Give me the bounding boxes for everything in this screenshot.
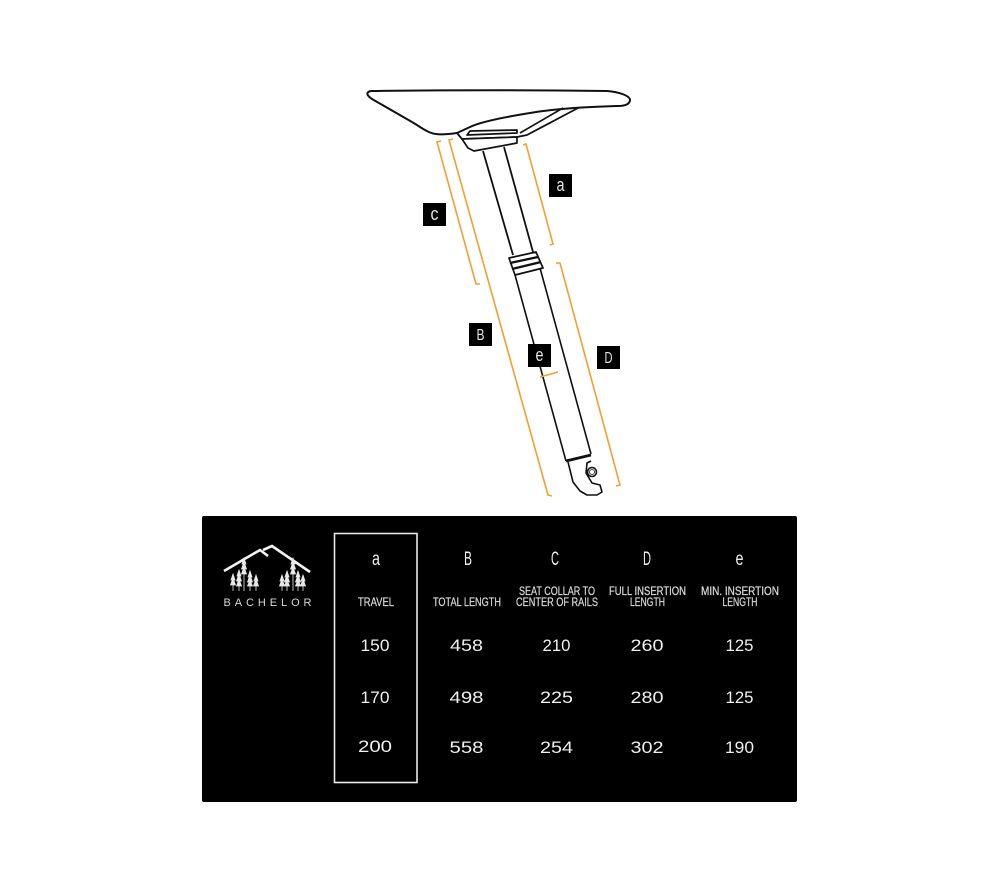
label D: D — [604, 350, 612, 367]
column D: full insertion length: LENGTH — [630, 595, 665, 609]
label c — [423, 203, 446, 226]
upper post tube — [483, 147, 533, 255]
column B: total length: 498 — [450, 688, 484, 707]
label e: e — [536, 345, 544, 365]
post collar — [509, 252, 543, 275]
column e: min insertion length: e — [736, 549, 744, 570]
orange bracket a — [523, 144, 553, 245]
column e: min insertion length: LENGTH — [722, 595, 758, 609]
column D: full insertion length: 302 — [630, 738, 664, 757]
label a: a — [556, 175, 565, 195]
column D: full insertion length: D — [643, 549, 651, 570]
column C: seat collar to center of rails: C — [551, 549, 559, 570]
column D: full insertion length: FULL INSERTION — [609, 584, 686, 598]
travel column highlight — [334, 534, 417, 782]
label B: B — [476, 327, 484, 344]
post lever head — [568, 461, 602, 495]
saddle — [367, 90, 630, 151]
column B: total length: 558 — [450, 738, 484, 757]
column a: travel: a — [372, 549, 380, 570]
column e: min insertion length: MIN. INSERTION — [701, 584, 779, 598]
orange bracket c — [437, 141, 480, 284]
column C: seat collar to center of rails: SEAT COLLAR TO — [519, 584, 595, 598]
panel: spec table — [202, 516, 797, 802]
column D: full insertion length — [609, 549, 686, 757]
label c: c — [430, 204, 438, 224]
column C: seat collar to center of rails: 254 — [540, 738, 573, 757]
column B: total length: B — [464, 549, 472, 570]
column e: min insertion length: 125 — [726, 688, 754, 707]
column B: total length: 458 — [450, 636, 483, 655]
label a — [549, 174, 572, 197]
column B: total length — [433, 549, 501, 757]
seatpost diagram — [367, 90, 630, 496]
label D — [597, 346, 620, 369]
column e: min insertion length — [701, 549, 779, 757]
column C: seat collar to center of rails — [516, 549, 598, 757]
label B — [469, 323, 492, 346]
column a: travel: TRAVEL — [358, 595, 394, 609]
column D: full insertion length: 260 — [630, 636, 664, 655]
column e: min insertion length: 190 — [725, 738, 754, 757]
column C: seat collar to center of rails: CENTER OF RAILS — [516, 595, 598, 609]
orange bracket B — [449, 139, 552, 496]
column D: full insertion length: 280 — [630, 688, 664, 707]
column a: travel — [358, 549, 394, 756]
orange bracket D — [556, 263, 620, 486]
column a: travel: 200 — [358, 737, 392, 756]
column e: min insertion length: 125 — [726, 636, 754, 655]
logo wordmark: BACHELOR — [224, 597, 312, 609]
logo trees — [230, 558, 306, 591]
column C: seat collar to center of rails: 210 — [542, 636, 570, 655]
label e — [528, 344, 551, 367]
column a: travel: 170 — [360, 688, 390, 707]
logo: Bachelor — [224, 546, 312, 609]
column a: travel: 150 — [360, 636, 390, 655]
column B: total length: TOTAL LENGTH — [433, 595, 501, 609]
lower post tube — [515, 268, 591, 461]
column C: seat collar to center of rails: 225 — [540, 688, 573, 707]
logo mountains — [224, 546, 310, 572]
orange bracket e — [540, 372, 558, 377]
